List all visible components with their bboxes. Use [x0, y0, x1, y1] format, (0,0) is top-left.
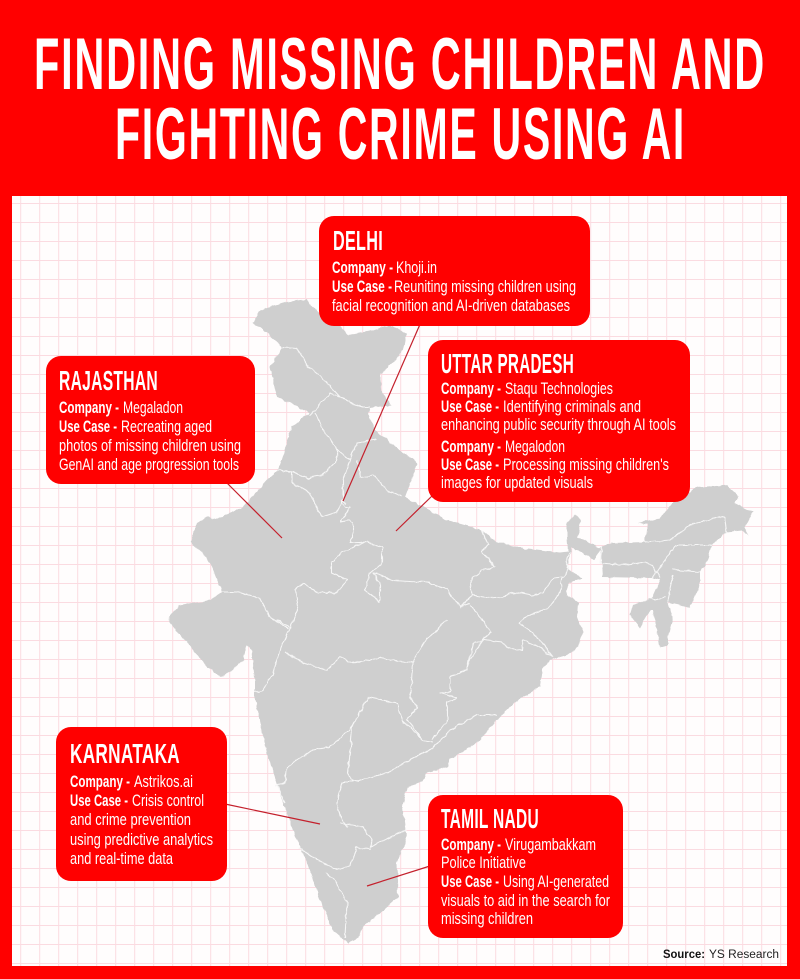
callout: Tamil Nadu: missing children — [441, 909, 533, 928]
callout: Uttar Pradesh — [428, 340, 690, 502]
callout: Delhi: Company - — [332, 258, 393, 277]
callout: Karnataka: Use Case - — [70, 791, 128, 810]
source credit: YS Research — [709, 949, 779, 961]
panel: grid background — [12, 196, 787, 966]
leader line: Karnataka — [225, 804, 320, 824]
callout: Delhi: facial recognition and AI-driven databases — [332, 296, 570, 315]
callout: Karnataka: using predictive analytics — [70, 830, 213, 849]
leader line: Delhi — [343, 322, 421, 501]
callout: Rajasthan: GenAI and age progression tools — [59, 455, 239, 474]
callout: Delhi: Reuniting missing children using — [394, 277, 576, 296]
callout: Uttar Pradesh: Use Case - — [441, 455, 499, 474]
callout: Tamil Nadu: Use Case - — [441, 872, 499, 891]
callout: Tamil Nadu: visuals to aid in the search for — [441, 891, 610, 910]
callout: Tamil Nadu: TAMIL NADU — [441, 803, 539, 834]
leader line: Tamil Nadu — [367, 866, 430, 886]
callout: Rajasthan: photos of missing children using — [59, 436, 241, 455]
callout: Uttar Pradesh: Megalodon — [505, 437, 565, 456]
leader line: Uttar Pradesh — [396, 495, 433, 531]
callout: Uttar Pradesh: Company - — [441, 437, 501, 456]
callout: Karnataka: and crime prevention — [70, 810, 191, 829]
source credit: Source: — [663, 949, 705, 961]
callout: Rajasthan: Company - — [59, 398, 119, 417]
callout: Karnataka: and real-time data — [70, 849, 173, 868]
callout: Karnataka: Astrikos.ai — [134, 772, 193, 791]
callout: Uttar Pradesh: Use Case - — [441, 397, 499, 416]
callout: Rajasthan: RAJASTHAN — [59, 365, 158, 396]
callout: Tamil Nadu: Company - — [441, 835, 501, 854]
callout: Rajasthan: Use Case - — [59, 417, 117, 436]
callout: Rajasthan: Megaladon — [123, 398, 183, 417]
callout: Uttar Pradesh: Identifying criminals and — [503, 397, 641, 416]
callout: Uttar Pradesh: Company - — [441, 379, 501, 398]
callout: Delhi: Khoji.in — [396, 258, 437, 277]
callout: Delhi: Use Case - — [332, 277, 392, 296]
callout: Karnataka: KARNATAKA — [70, 738, 180, 769]
callout: Delhi: DELHI — [333, 225, 383, 256]
callout: Uttar Pradesh: enhancing public security through AI tools — [441, 415, 676, 434]
leader line: Rajasthan — [226, 482, 282, 538]
callout: Tamil Nadu: Using AI-generated — [503, 872, 609, 891]
callout: Uttar Pradesh: Processing missing children's — [503, 455, 669, 474]
callout: Tamil Nadu: Virugambakkam — [505, 835, 596, 854]
callout: Karnataka: Crisis control — [132, 791, 204, 810]
callout: Karnataka: Company - — [70, 772, 130, 791]
callout: Uttar Pradesh: images for updated visuals — [441, 473, 593, 492]
callout: Rajasthan — [46, 356, 255, 484]
callout: Karnataka — [56, 727, 227, 881]
callout: Delhi — [319, 216, 590, 326]
callout: Uttar Pradesh: UTTAR PRADESH — [441, 348, 574, 379]
callout: Tamil Nadu: Police Initiative — [441, 853, 526, 872]
callout: Rajasthan: Recreating aged — [121, 417, 212, 436]
title — [34, 24, 766, 175]
map of India — [168, 299, 753, 943]
callout: Uttar Pradesh: Staqu Technologies — [505, 379, 613, 398]
callout: Tamil Nadu — [428, 795, 623, 938]
source credit — [663, 949, 779, 961]
